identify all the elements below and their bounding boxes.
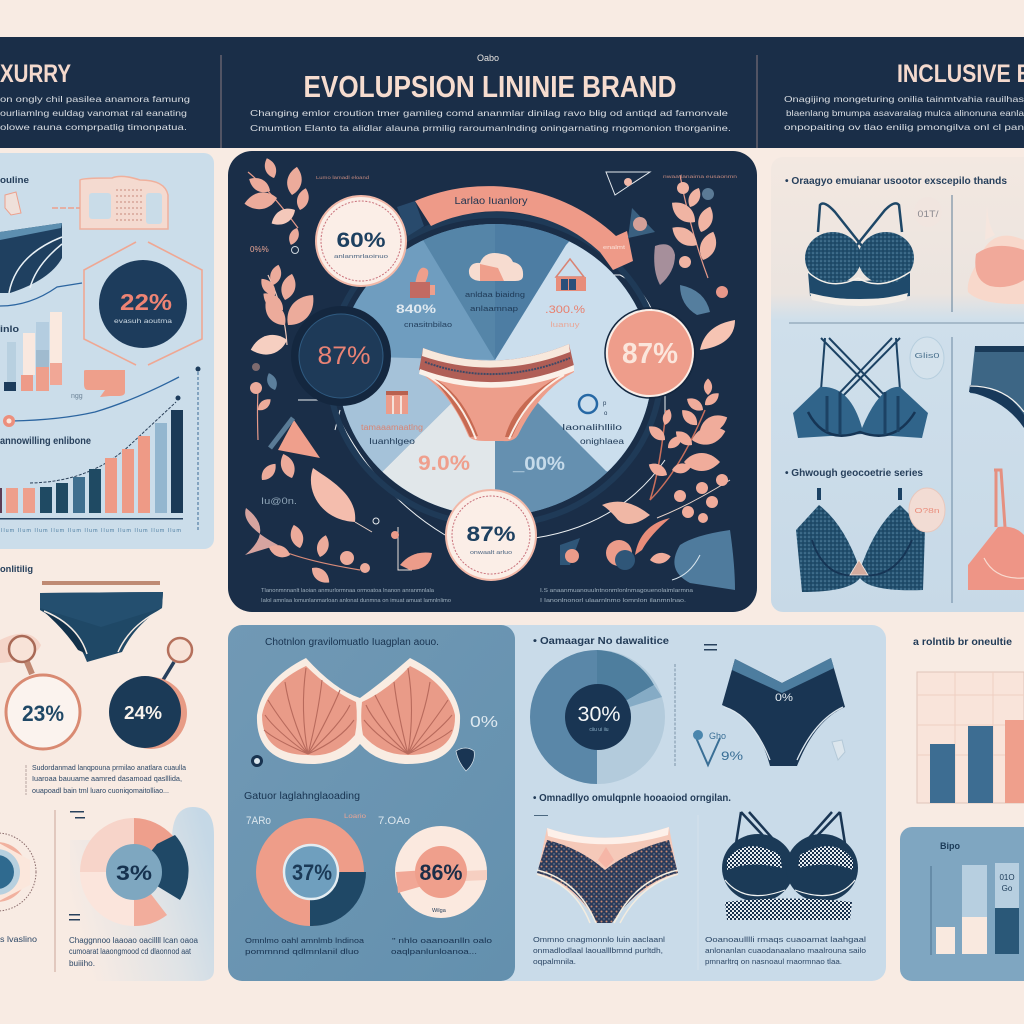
product: lace bra (722, 812, 858, 920)
panel: donut 3% (69, 807, 214, 981)
stacked bar chart: 01O (999, 873, 1015, 882)
segment: icon and label lower right: Iaonalihllilo (562, 423, 623, 432)
leaves: top left branch (243, 156, 311, 246)
captions: top small labels: Lumo lamadl eloand (316, 175, 370, 180)
small labels left (250, 245, 298, 506)
captions: panel footer right: I.S anaanmuanouulntnonmlonlnmagouenolaimlarmna (540, 588, 694, 594)
captions: donuts: " nhlo oaanoanlln oalo (392, 936, 492, 945)
illustration: dark briefs (0, 223, 62, 293)
arc banner: Larlao Iuanlory (454, 196, 528, 207)
segment value: -00%: _00% (512, 454, 565, 475)
stat: 60%: anlanmrlaoinuo (334, 254, 388, 260)
small mark (534, 815, 548, 816)
stat: 87% left (291, 306, 391, 406)
badge: salmon stamp (909, 488, 945, 532)
leaves: right middle branch (646, 378, 730, 500)
icons: bottom center (373, 518, 635, 570)
stat: 87% left: 87% (318, 342, 370, 370)
callout tag (71, 370, 125, 400)
donut chart: 3% (116, 862, 152, 885)
right header: inclusive: Onagijing mongeturing onilia tainmtvahia rauilhas (784, 94, 1024, 104)
segment: icon and label top right (545, 259, 586, 329)
stat: 60%: 60% (336, 229, 386, 252)
captions: left product: onmadlodlaal laoualllbmnd purltdh, (533, 946, 663, 955)
captions: right product: Ooanoaulllli rmaqs cuaoamat laahgaal (705, 935, 866, 944)
badge: pink stamp (914, 197, 942, 227)
heading: lower: Gatuor laglahnglaoading (244, 791, 360, 802)
segment: icon and label top: anlaamnap (470, 304, 518, 313)
center header: description: Changing emlor croution tmer gamileg comd ananmlar dinilag ravo blig od antiqd ad famonvale (250, 108, 728, 118)
left header: luxury: ourliamlng euldag vanomat ral eanating (0, 108, 187, 118)
donut 37%: 7ARo (246, 815, 271, 827)
donut 37%: 37% (292, 860, 332, 885)
dark ring (329, 215, 661, 525)
donut 86%: Wilga (432, 908, 447, 914)
small bar chart (4, 312, 62, 391)
right header: inclusive: blaenlang bmumpa asavaralag mulca alinonuna eanla (786, 108, 1024, 118)
caption: Chaggnnoo laaoao oacillll lcan oaoa (69, 936, 199, 945)
panel: small stacked bars (900, 827, 1024, 981)
stat: 0%: 0% (470, 714, 498, 731)
caption: cumoarat laaongmood cd dlaonnod aat (69, 947, 192, 956)
stat: 87% right: 87% (622, 338, 678, 370)
stat: 23% magnifier: 23% (22, 701, 64, 726)
leaves: left middle branch (248, 263, 321, 359)
header band (0, 37, 1024, 148)
pie chart (342, 224, 650, 512)
segment: icon and label lower right: p (603, 401, 607, 407)
panel: left market overview (0, 153, 214, 549)
icon: small tag (5, 192, 21, 215)
donut 86%: 7.OAo (378, 815, 410, 827)
captions: left product (533, 935, 665, 966)
captions: left product: Ommno cnagmonnlo luin aaclaanl (533, 935, 665, 944)
stat: 24% pendant (109, 638, 192, 749)
donut 37% (246, 814, 367, 926)
right header: inclusive: onpopaiting ov tlao enilig pmongilva onl cl pan (784, 122, 1024, 132)
captions: donuts: oaqlpanlunloanoa... (391, 947, 477, 956)
stacked bar chart (931, 863, 1019, 955)
arc banner (397, 186, 633, 270)
pie chart 30%: ciiu ui iiu (589, 727, 609, 733)
center header: description: Cmumtion Elanto ta alidlar alauna prmilig raroumanlnding oningarnating rngomonion thorganine. (250, 123, 731, 133)
stacked bar chart: Go (1002, 884, 1013, 893)
icon: location pin with 9%: Gho (709, 731, 726, 741)
panel: light blue consumer insights (490, 625, 886, 981)
segment: icon and label lower left (361, 391, 423, 446)
text block: Sudordanmad lanqpouna prmilao anatlara cuaulla (32, 763, 187, 772)
stat: 22% hexagon: evasuh aoutma (114, 318, 172, 325)
captions: right product: pmnarltrq on nasnoaul rnaormnao tlaa. (705, 957, 842, 966)
segment: icon and label top (465, 253, 525, 313)
donut chart (80, 818, 189, 926)
center header: title: EVOLUPSION LININIE BRAND (304, 69, 676, 104)
panel: central pie (228, 151, 757, 612)
heading: top: Chotnlon gravilomuatlo Iuagplan aouo. (265, 637, 439, 648)
outer ring lines (298, 275, 665, 538)
segment: icon and label lower left: Iuanhlgeo (369, 437, 416, 446)
heading: left panel: ouline (0, 175, 29, 185)
stat: 22% hexagon (84, 242, 202, 365)
badge: light stamp: Glis0 (914, 353, 940, 360)
stat: 24% pendant: 24% (124, 703, 162, 723)
donut 86%: 86% (420, 860, 462, 885)
segment: icon and label top right: .300.% (545, 304, 585, 316)
pie chart 30% (530, 650, 665, 784)
divider and ornament circle (0, 810, 55, 972)
illustration: navy briefs (40, 581, 163, 662)
left header: luxury: on ongly chil pasilea anamora famung (0, 94, 190, 104)
product: strappy navy bra (793, 338, 928, 438)
small labels left: Iu@0n. (261, 496, 297, 506)
stat: 87% bottom (446, 490, 536, 580)
donut 37%: Loario (344, 814, 367, 820)
captions: panel footer left: Tlanonmnnanlt laoian anmurlormnaa ormoatoa lnanon anranmnlala (261, 588, 435, 594)
small labels left: 0%% (250, 245, 269, 254)
segment: icon and label top left: 840% (396, 302, 436, 316)
text block: Iuaroaa bauuame aamred dasamoad qaslllida, (32, 774, 182, 783)
arc banner: enalmt (603, 245, 626, 251)
leaves: lower left foliage (245, 418, 372, 587)
heading: bar chart: annowilling enlibone (0, 436, 91, 447)
caption (69, 936, 199, 968)
heading: a rolntib br oneultie (913, 637, 1012, 648)
segment: icon and label lower right: onighlaea (580, 437, 625, 446)
illustration: planner device (52, 176, 168, 229)
product: lace balconette bra (805, 203, 914, 306)
icons: pins (251, 748, 474, 771)
stat: 23% magnifier (0, 634, 80, 749)
captions: panel footer left (261, 588, 451, 604)
stat: 22% hexagon: 22% (120, 289, 172, 315)
callout tag: ngg (71, 393, 83, 400)
segment: icon and label top right: luanuy (550, 322, 580, 329)
panel: right product gallery (771, 157, 1024, 612)
icon: small rose left (250, 363, 279, 440)
left header: luxury: olowe rauna comprpatlig timonpatua. (0, 122, 187, 132)
trend line upper (0, 283, 82, 306)
segment: icon and label lower left: tamaaamaatlng (361, 423, 423, 432)
captions: donuts (245, 936, 492, 956)
product: navy briefs partial (969, 346, 1024, 428)
leaves: right lower foliage (602, 474, 735, 590)
heading: pie: • Oamaagar No dawalitice (533, 636, 669, 647)
captions: top small labels (316, 174, 738, 180)
text block (26, 763, 187, 795)
captions: panel footer right (540, 588, 694, 604)
label: small bars: inlo (0, 324, 20, 334)
product: lace briefs (537, 827, 678, 923)
segment: icon and label lower right (562, 395, 625, 446)
icon: location pin with 9%: 9% (721, 749, 743, 763)
segment value: 9.0%: 9.0% (418, 452, 470, 475)
column chart (917, 672, 1024, 803)
leaves: right top branch (654, 175, 735, 350)
small marks (704, 644, 717, 650)
segment: icon and label top left (396, 268, 452, 329)
heading: lower products: • Omnadllyo omulqpnle hooaoiod orngilan. (533, 793, 731, 804)
badge: light stamp (910, 337, 944, 379)
segment: icon and label lower right: o (604, 411, 608, 417)
left bottom caption: s lvaslino (0, 935, 38, 944)
product: lace plunge bra (796, 488, 925, 592)
center header: description (250, 108, 731, 133)
panel: bottom right column chart (913, 637, 1024, 803)
illustration: salmon lace bra (257, 658, 460, 764)
badge: pink stamp: 01T/ (918, 209, 939, 219)
stat: 87% bottom: 87% (466, 523, 516, 546)
icon: faint gem (832, 740, 845, 760)
captions: panel footer left: Ialol amnlaa lomunlanmarloan anlonat dunmna on imuat amuat lamnlnlimo (261, 598, 451, 604)
left header: luxury: XURRY (0, 60, 71, 88)
trend line lower (3, 366, 200, 532)
captions: donuts: pommnnd qdlmnlanil dluo (245, 947, 359, 956)
heading: right panel bottom: • Ghwough geocoetrie series (785, 468, 923, 479)
growth bar chart: Ilum Ilum Ilum Ilum Ilum Ilum Ilum Ilum Ilum Ilum Ilum (1, 528, 181, 534)
small marks (69, 811, 85, 920)
heading: Bipo (940, 841, 960, 851)
product: navy briefs: 0% (775, 692, 793, 704)
captions: right product (705, 935, 866, 966)
product: salmon striped bra partial (968, 470, 1024, 590)
product: navy briefs (722, 658, 845, 766)
growth bar chart (0, 410, 183, 534)
captions: top small labels: nwaa lanaima eusaonmn (663, 174, 738, 179)
donut 86% (378, 815, 487, 918)
heading: right panel top: • Oraagyo emuianar usootor exscepilo thands (785, 176, 1007, 187)
captions: donuts: Omnlmo oahl amnlmb lndinoa (245, 936, 365, 945)
segment: icon and label top left: cnasitnbilao (404, 320, 452, 329)
caption: buiiiho. (69, 959, 95, 968)
panel: mid blue comparison (228, 625, 515, 981)
captions: left product: oqpalmnila. (533, 957, 576, 966)
leaves: top right emblem (606, 172, 655, 238)
heading: onlitilig (0, 564, 33, 574)
stat: 60% (316, 196, 406, 286)
center header: title: Oabo (477, 53, 499, 63)
captions: right product: anlonanlan cuaodanaalano maalrouna sailo (705, 946, 866, 955)
stat: 87% bottom: onwaalt arluo (470, 550, 512, 556)
segment: icon and label top: anldaa biaidng (465, 290, 525, 299)
section: lower left briefs and rings (0, 564, 214, 981)
captions: panel footer right: I Ianonlnonorl ulaarnlnmo lomnlon ilanmnlnao. (540, 598, 687, 604)
text block: ouapoadl bain tml luaro cuoniqomaitolliao... (32, 786, 169, 795)
icon: location pin with 9% (693, 730, 743, 765)
left header: luxury (0, 60, 190, 132)
center header: title (304, 53, 676, 104)
badge: salmon stamp: O?8n (914, 508, 940, 515)
stat: 87% right (605, 308, 695, 398)
product: salmon bra partial (968, 205, 1024, 304)
right header: inclusive (784, 60, 1024, 132)
pie chart 30%: 30% (578, 703, 620, 726)
illustration: central briefs (419, 344, 574, 441)
